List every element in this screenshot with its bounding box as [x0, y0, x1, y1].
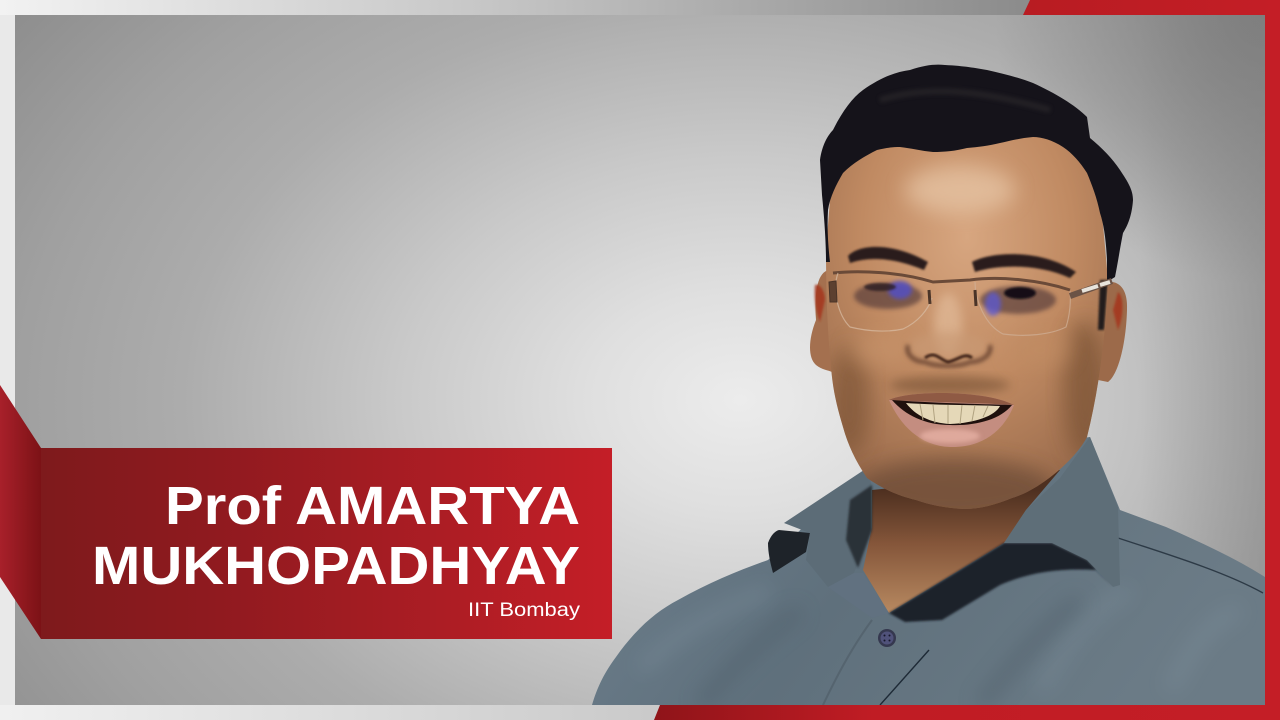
eyes	[854, 281, 1056, 316]
smile with teeth	[889, 393, 1014, 447]
eyebrows	[848, 247, 1076, 278]
speaker name: Prof AMARTYA	[165, 476, 580, 536]
banner fold on the left	[0, 385, 41, 639]
red name banner	[0, 385, 612, 639]
shirt body	[592, 437, 1265, 705]
right ear	[1098, 282, 1127, 382]
hair	[820, 65, 1133, 282]
shirt button	[878, 629, 896, 647]
left collar and dark underside	[768, 468, 889, 618]
nose	[907, 293, 990, 366]
face	[826, 120, 1108, 522]
left ear	[810, 270, 832, 372]
frame: red accent top, right and bottom	[654, 0, 1280, 720]
affiliation: IIT Bombay	[468, 600, 581, 621]
glasses	[829, 272, 1112, 335]
banner body	[41, 448, 612, 639]
right collar and dark shadow	[889, 437, 1120, 622]
portrait photo of the speaker	[592, 65, 1265, 705]
neck	[863, 470, 1060, 613]
speaker name: MUKHOPADHYAY	[92, 536, 580, 596]
speaker name	[92, 476, 580, 596]
